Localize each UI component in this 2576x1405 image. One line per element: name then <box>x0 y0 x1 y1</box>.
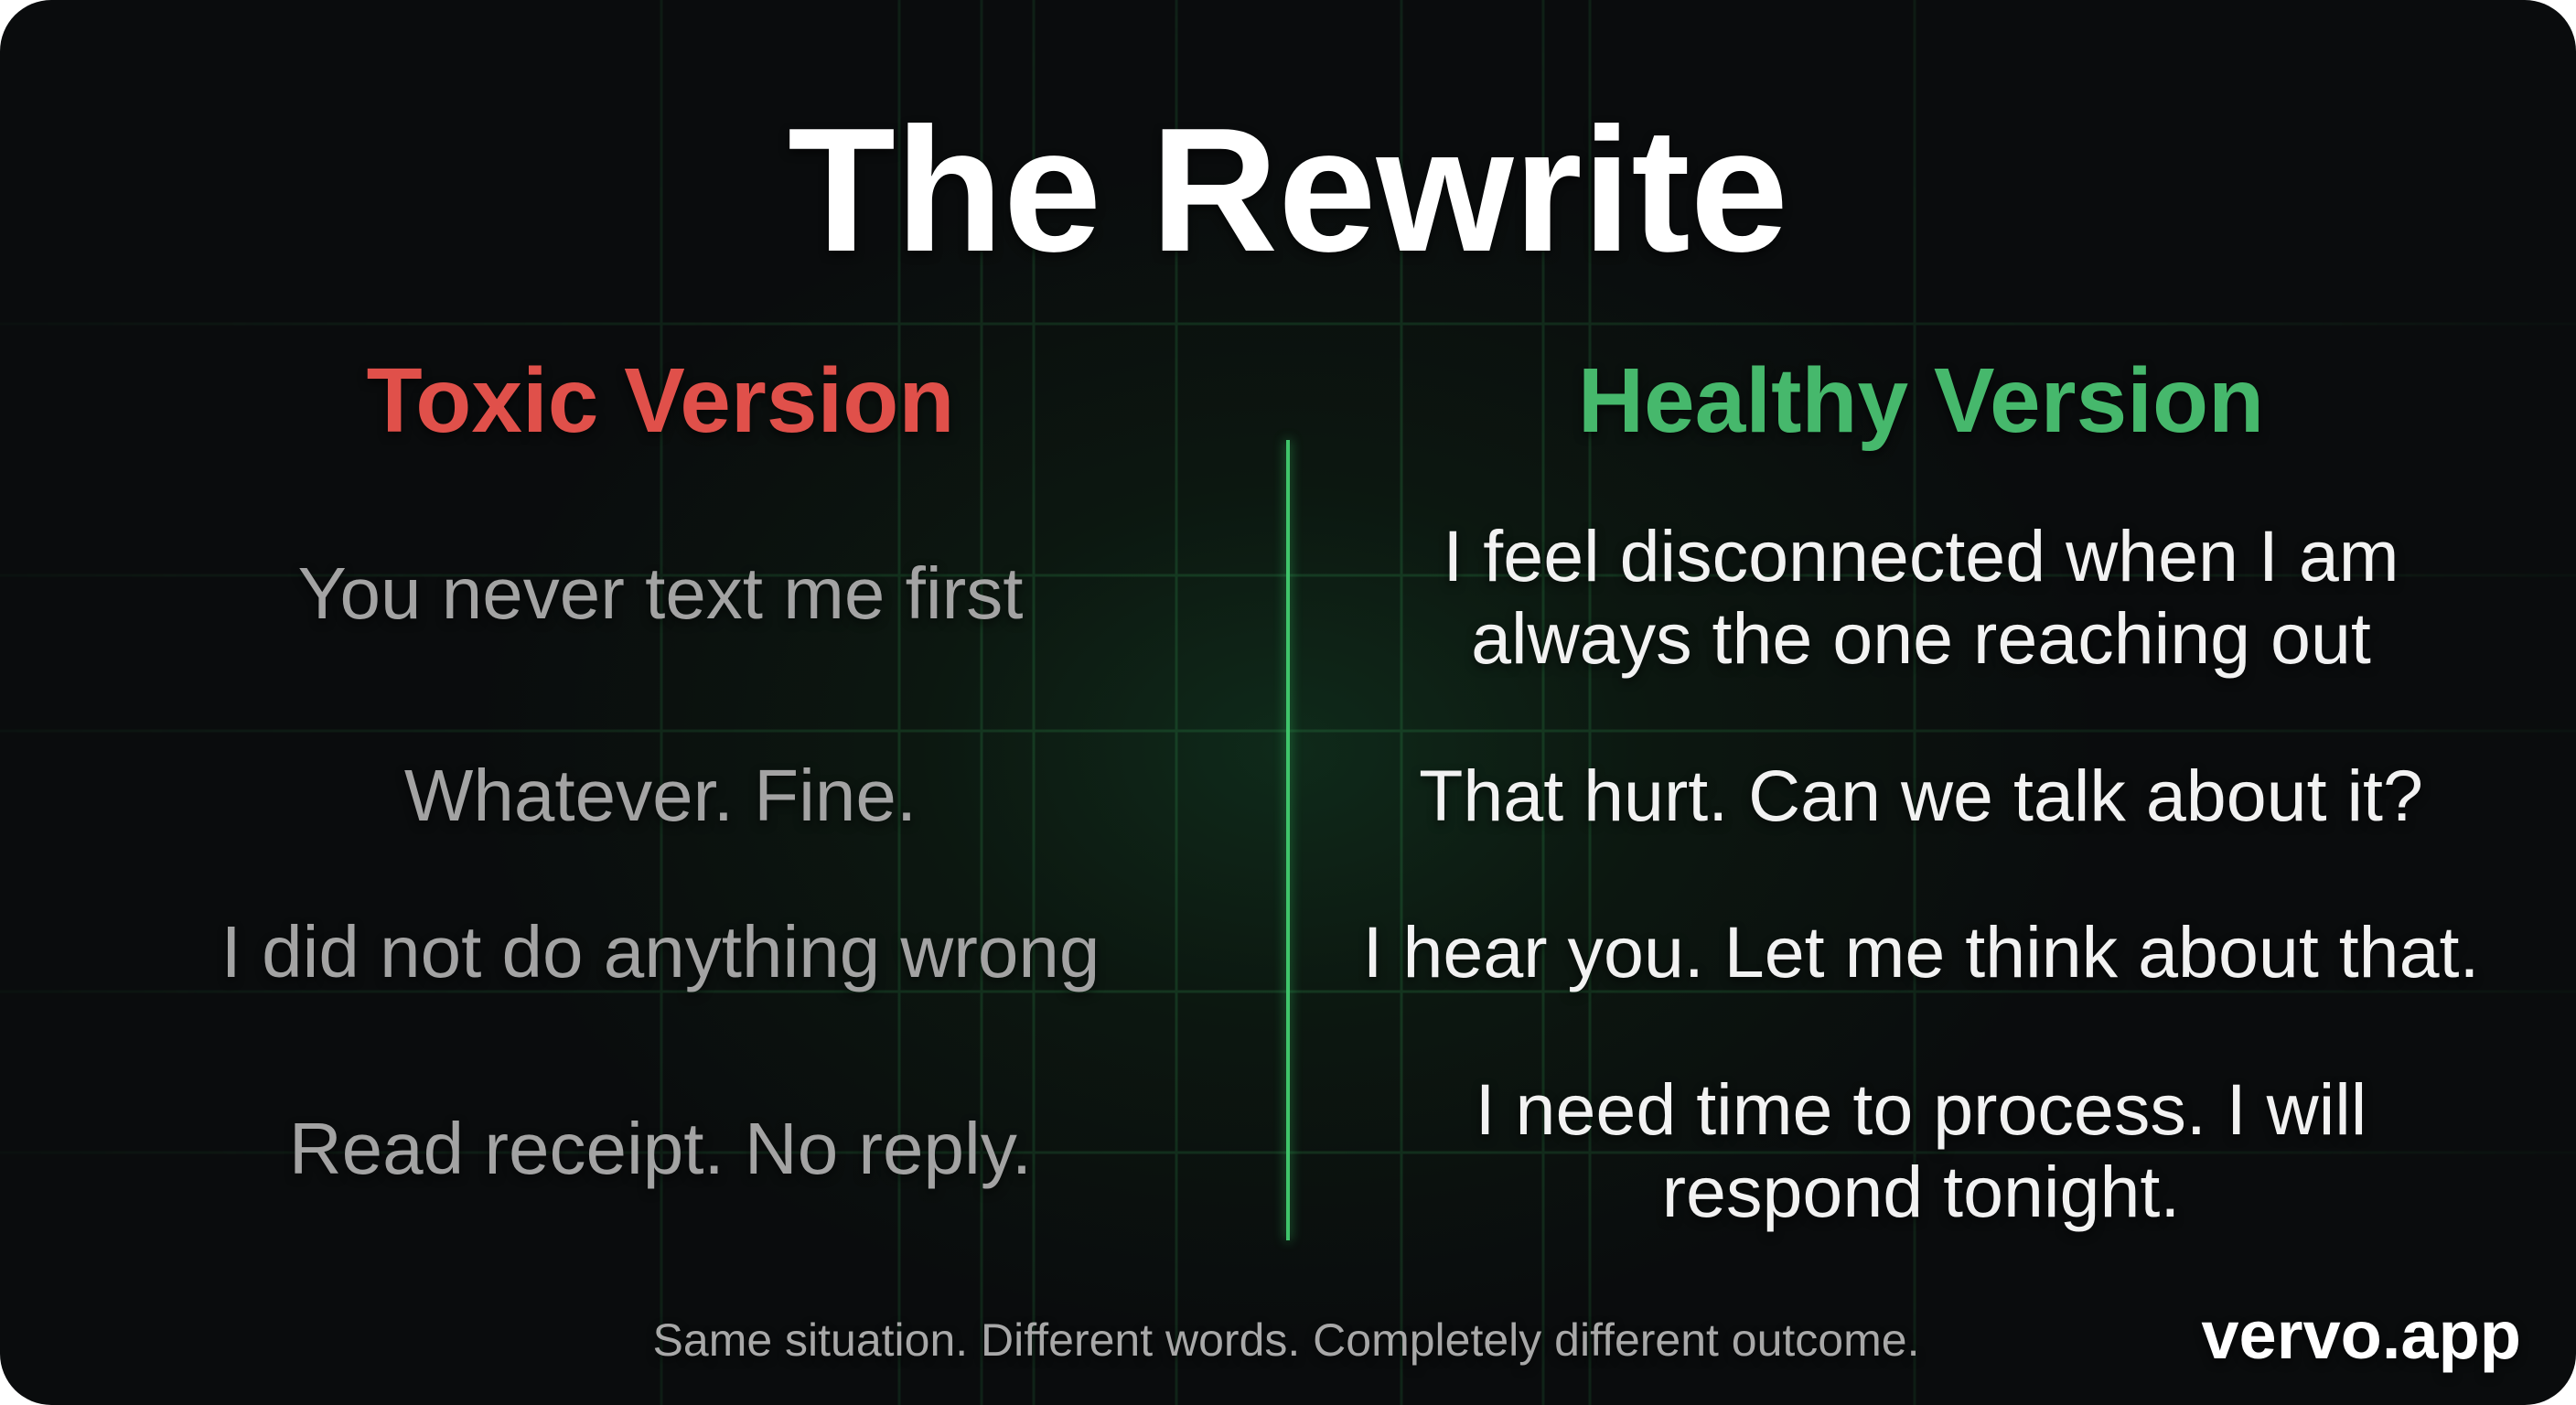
healthy line 1: always the one reaching out <box>1471 597 2371 679</box>
heading: toxic: Toxic Version <box>367 349 954 452</box>
footer tagline: Same situation. Different words. Completely different outcome. <box>653 1314 1919 1366</box>
toxic line 3: I did not do anything wrong <box>221 911 1100 992</box>
toxic line 1: You never text me first <box>298 552 1023 634</box>
divider <box>1286 440 1290 1240</box>
title: The Rewrite <box>788 91 1788 288</box>
healthy line 4: respond tonight. <box>1662 1151 2180 1232</box>
healthy line 1 <box>1443 515 2399 679</box>
healthy line 3: I hear you. Let me think about that. <box>1363 911 2479 992</box>
healthy line 2: That hurt. Can we talk about it? <box>1419 755 2423 836</box>
brand: vervo.app <box>2201 1297 2521 1373</box>
healthy line 4: I need time to process. I will <box>1476 1068 2367 1150</box>
healthy line 1: I feel disconnected when I am <box>1443 515 2399 596</box>
toxic line 2: Whatever. Fine. <box>404 755 917 836</box>
toxic line 4: Read receipt. No reply. <box>289 1108 1032 1189</box>
healthy line 4 <box>1476 1068 2367 1232</box>
heading: healthy: Healthy Version <box>1578 349 2264 452</box>
